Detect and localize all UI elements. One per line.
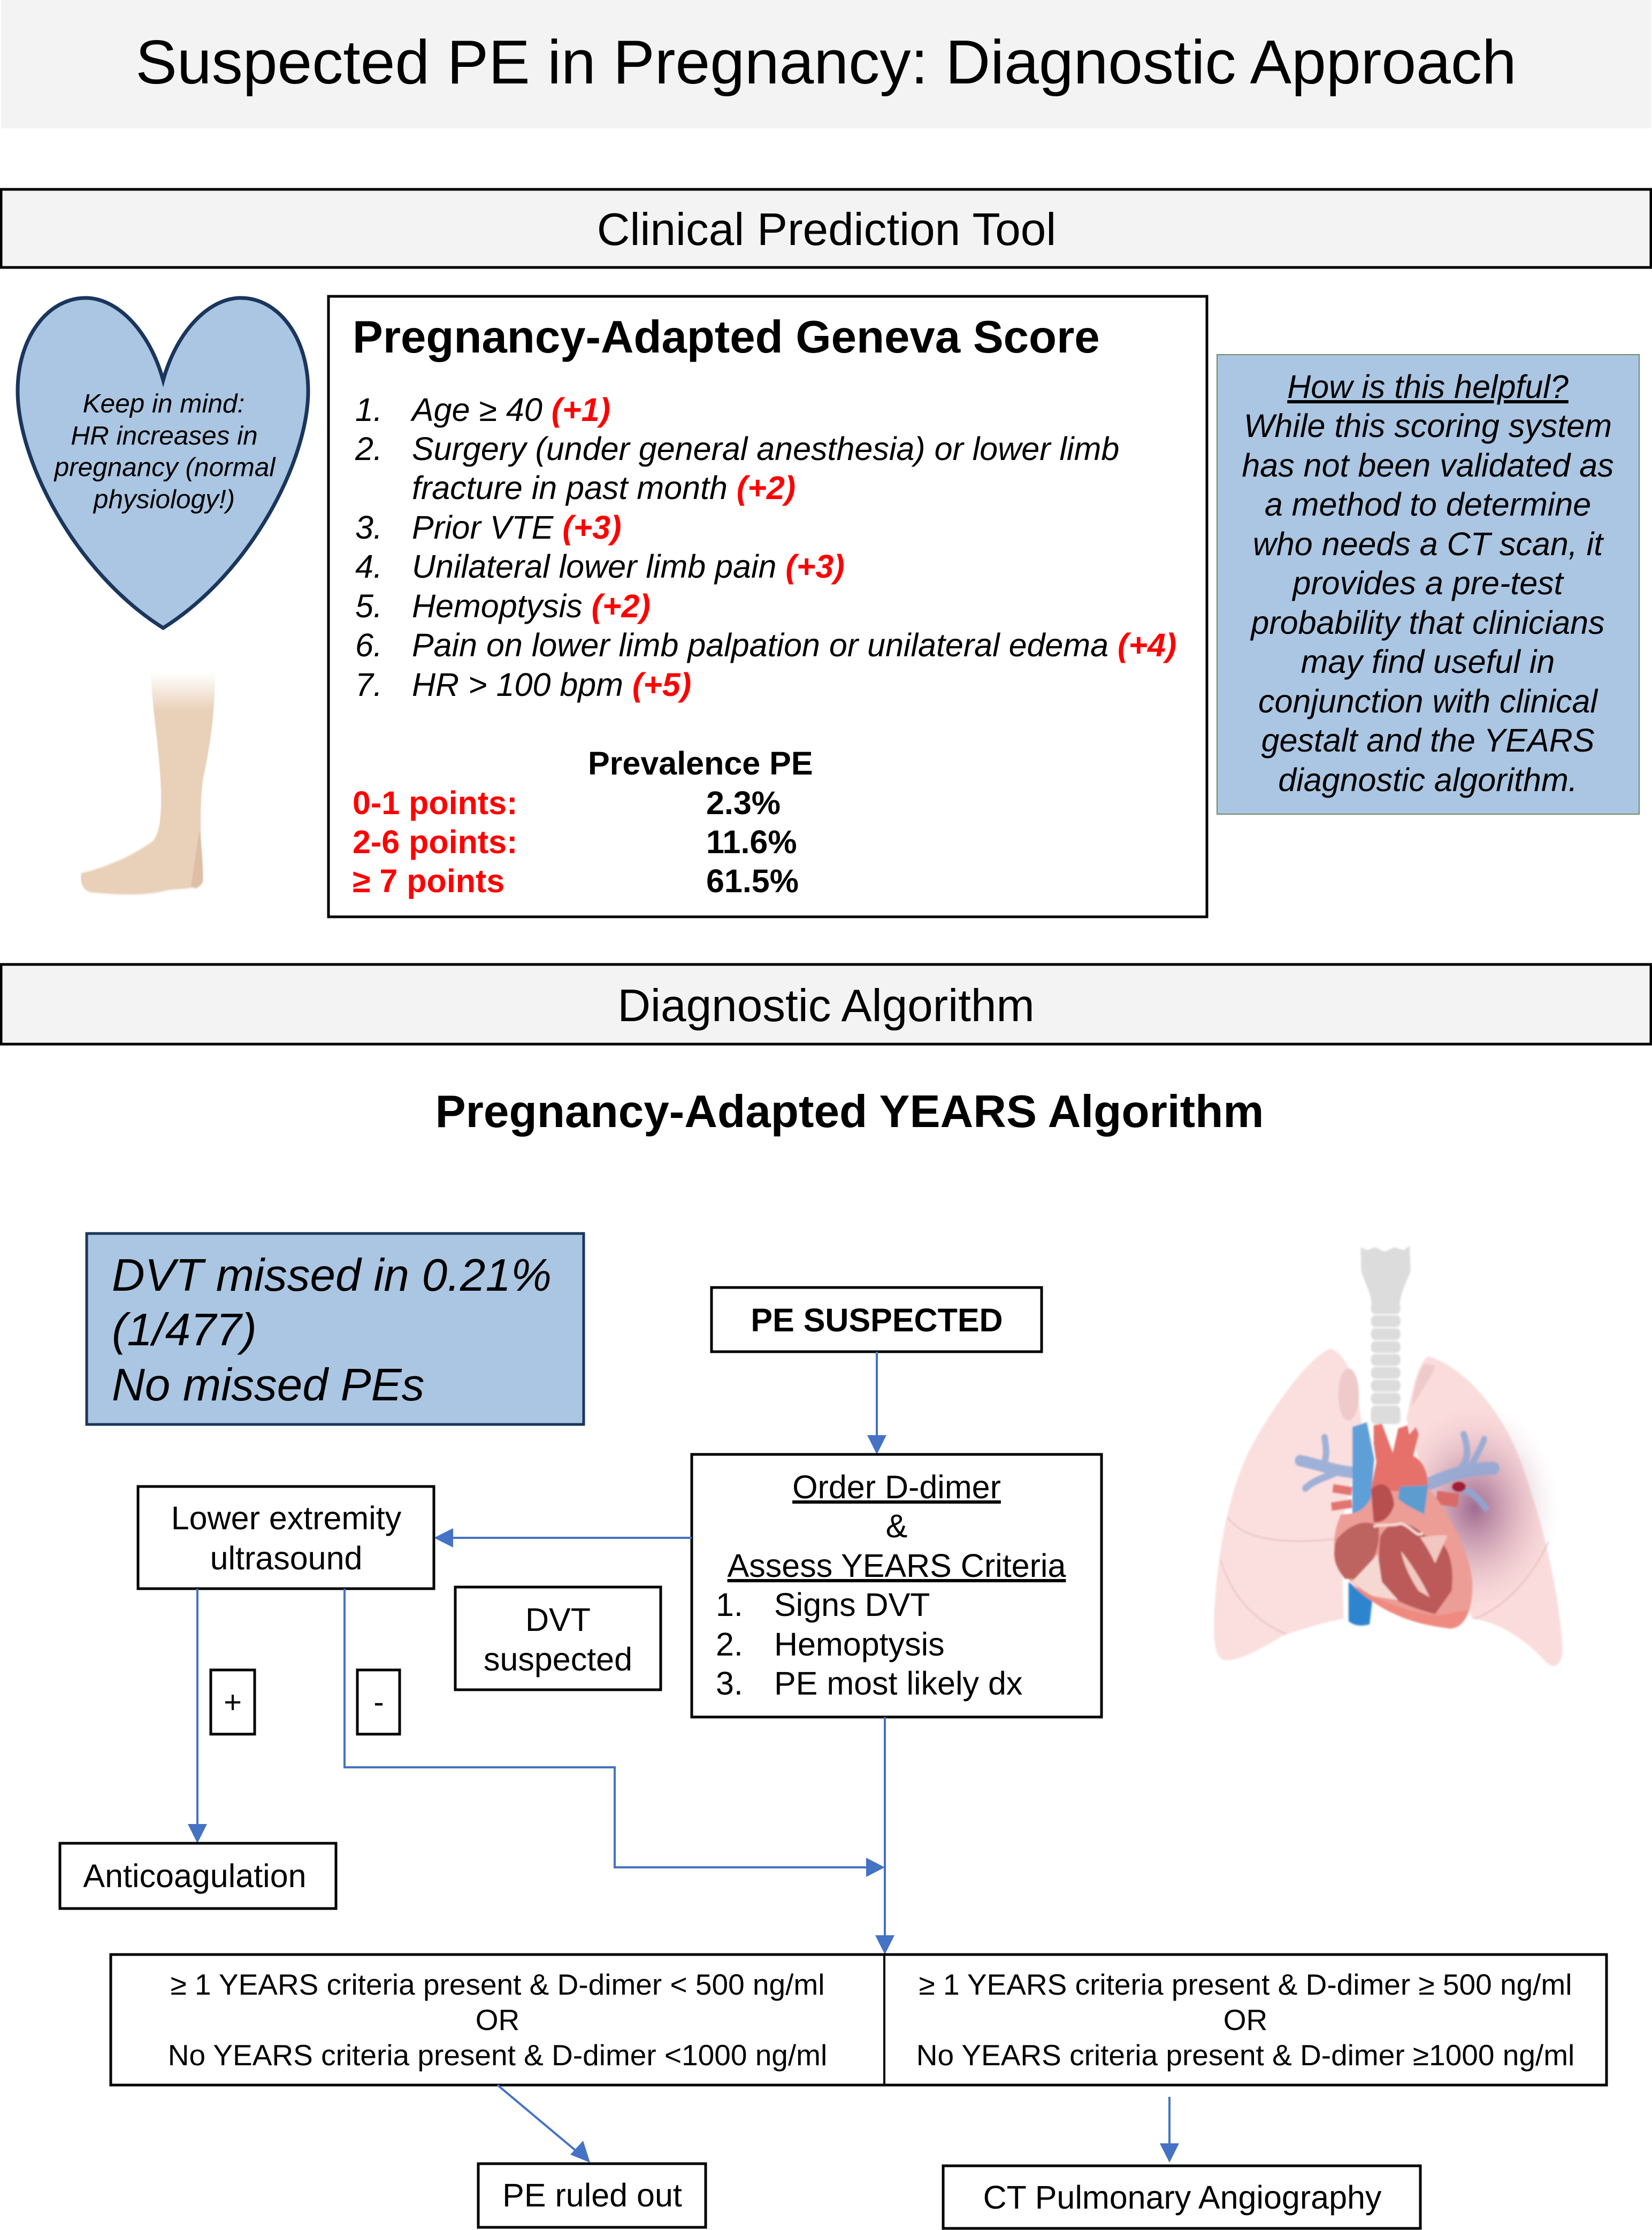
list: scoring criteria: 7. <box>355 666 383 703</box>
box: order D-dimer and assess YEARS criteria: Hemoptysis <box>774 1626 945 1662</box>
list: scoring criteria: 4. <box>355 548 383 585</box>
list: scoring criteria: 5. <box>355 588 383 624</box>
heading: diagnostic algorithm: Diagnostic Algorithm <box>617 980 1035 1031</box>
callout: DVT missed: No missed PEs <box>112 1360 424 1411</box>
box: lower extremity ultrasound <box>138 1486 434 1589</box>
aorta arch <box>1371 1424 1428 1493</box>
table: prevalence of PE by score: 11.6% <box>706 824 797 860</box>
box: PE suspected <box>712 1288 1042 1352</box>
callout: how is this helpful: a method to determine <box>1265 486 1591 523</box>
text: rule-out criteria: No YEARS criteria present & D-dimer <1000 ng/ml <box>168 2039 827 2072</box>
callout: how is this helpful: may find useful in <box>1301 643 1555 680</box>
arrow: to PE ruled out <box>498 2085 590 2163</box>
callout: how is this helpful: probability that clinicians <box>1250 604 1605 641</box>
list: scoring criteria: Unilateral lower limb pain (+3) <box>412 548 845 585</box>
callout: how is this helpful: who needs a CT scan, it <box>1253 526 1604 562</box>
box: order D-dimer and assess YEARS criteria <box>692 1454 1102 1717</box>
list: scoring criteria: fracture in past month (+2) <box>412 470 796 506</box>
arrow: positive to anticoagulation <box>188 1589 207 1843</box>
list: scoring criteria <box>355 392 1176 703</box>
box: DVT suspected: suspected <box>484 1641 632 1677</box>
heading: YEARS algorithm: Pregnancy-Adapted YEARS Algorithm <box>435 1086 1264 1137</box>
pulmonary artery trunk <box>1398 1485 1428 1514</box>
callout: how is this helpful: gestalt and the YEARS <box>1261 722 1595 758</box>
list: scoring criteria: HR > 100 bpm (+5) <box>412 666 691 703</box>
pulmonary vessels <box>1300 1435 1494 1508</box>
callout: DVT missed: (1/477) <box>112 1305 257 1355</box>
title <box>1 0 1651 128</box>
box: positive: + <box>224 1685 242 1720</box>
text: rule-out criteria: OR <box>476 2003 519 2036</box>
trachea <box>1360 1246 1411 1424</box>
table: prevalence of PE by score: 2-6 points: <box>353 824 517 860</box>
panel: heart callout: physiology!) <box>93 485 235 514</box>
arrow: D-dimer to ultrasound <box>434 1528 692 1547</box>
box: rule-out and CT criteria <box>111 1955 1607 2085</box>
box: DVT suspected <box>455 1587 661 1690</box>
list: scoring criteria: Prior VTE (+3) <box>412 509 622 546</box>
callout: how is this helpful: While this scoring system <box>1244 408 1612 444</box>
inferior vena cava <box>1349 1582 1372 1626</box>
box: order D-dimer and assess YEARS criteria: & <box>886 1508 907 1544</box>
box: negative: - <box>373 1685 384 1720</box>
text: rule-out criteria <box>168 1968 827 2072</box>
heart body <box>1334 1484 1473 1629</box>
list: scoring criteria: 2. <box>355 431 383 467</box>
callout: how is this helpful <box>1217 355 1639 814</box>
box: order D-dimer and assess YEARS criteria: 3. <box>716 1665 743 1702</box>
embolus shadow <box>1390 1404 1559 1613</box>
text: rule-out criteria: ≥ 1 YEARS criteria present & D-dimer < 500 ng/ml <box>171 1968 824 2001</box>
list: scoring criteria: Surgery (under general anesthesia) or lower limb <box>412 431 1119 467</box>
box: lower extremity ultrasound: Lower extremity <box>171 1500 402 1536</box>
text: CT criteria: OR <box>1223 2003 1267 2036</box>
list: scoring criteria: Pain on lower limb palpation or unilateral edema (+4) <box>412 627 1176 663</box>
box: lower extremity ultrasound: ultrasound <box>210 1540 362 1576</box>
box: DVT suspected: DVT <box>525 1601 591 1638</box>
box: positive <box>211 1670 255 1734</box>
callout: how is this helpful: conjunction with clinical <box>1258 683 1598 719</box>
table: prevalence of PE by score: 61.5% <box>706 863 799 899</box>
box: PE ruled out <box>478 2164 706 2227</box>
heading: Geneva score: Pregnancy-Adapted Geneva Score <box>353 312 1100 363</box>
arrow: suspected to D-dimer <box>867 1352 886 1454</box>
table: prevalence of PE by score: Prevalence PE <box>588 745 813 781</box>
text: CT criteria: ≥ 1 YEARS criteria present & D-dimer ≥ 500 ng/ml <box>919 1968 1572 2001</box>
callout: DVT missed <box>87 1233 584 1424</box>
box: anticoagulation: Anticoagulation <box>83 1858 307 1894</box>
table: prevalence of PE by score: 2.3% <box>706 785 781 821</box>
panel: pregnancy-adapted Geneva score <box>328 296 1207 917</box>
box: anticoagulation <box>60 1843 336 1909</box>
box: order D-dimer and assess YEARS criteria: 2. <box>716 1626 743 1662</box>
callout: how is this helpful: How is this helpful? <box>1287 369 1569 405</box>
table: prevalence of PE by score <box>353 745 813 899</box>
heading: diagnostic algorithm <box>1 964 1651 1044</box>
list: scoring criteria: Age ≥ 40 (+1) <box>410 392 610 428</box>
text: CT criteria <box>916 1968 1574 2072</box>
icon: lungs and heart <box>1214 1246 1563 1666</box>
callout: how is this helpful: has not been validated as <box>1242 447 1614 484</box>
list: scoring criteria: 3. <box>355 509 383 546</box>
box: CT pulmonary angiography <box>943 2166 1420 2228</box>
superior vena cava <box>1352 1422 1374 1514</box>
box: order D-dimer and assess YEARS criteria: Order D-dimer <box>792 1469 1001 1505</box>
table: prevalence of PE by score: ≥ 7 points <box>353 863 504 899</box>
arrow: negative to result <box>345 1589 885 1877</box>
list: scoring criteria: 1. <box>355 392 383 428</box>
title: Suspected PE in Pregnancy: Diagnostic Approach <box>135 27 1517 97</box>
callout: how is this helpful: provides a pre-test <box>1291 565 1565 601</box>
lung: right of patient <box>1214 1348 1363 1660</box>
panel: heart callout <box>18 298 308 628</box>
heading: clinical prediction tool: Clinical Prediction Tool <box>597 204 1056 255</box>
panel: heart callout: Keep in mind: <box>83 389 244 418</box>
callout: DVT missed: DVT missed in 0.21% <box>112 1250 552 1301</box>
heading: clinical prediction tool <box>1 189 1651 267</box>
box: CT pulmonary angiography: CT Pulmonary Angiography <box>983 2179 1382 2216</box>
arrow: to CT pulmonary angiography <box>1160 2097 1179 2163</box>
list: scoring criteria: 6. <box>355 627 383 663</box>
box: negative <box>357 1670 400 1734</box>
lung: left of patient <box>1406 1356 1563 1666</box>
box: PE ruled out: PE ruled out <box>502 2177 682 2213</box>
icon: lower leg and foot <box>81 673 215 894</box>
box: order D-dimer and assess YEARS criteria: Signs DVT <box>774 1587 930 1623</box>
box: order D-dimer and assess YEARS criteria: 1. <box>716 1587 743 1623</box>
list: scoring criteria: Hemoptysis (+2) <box>412 588 651 624</box>
box: order D-dimer and assess YEARS criteria: PE most likely dx <box>774 1665 1022 1702</box>
table: prevalence of PE by score: 0-1 points: <box>353 785 517 821</box>
arrow: D-dimer to result boxes <box>875 1717 894 1955</box>
box: order D-dimer and assess YEARS criteria: Assess YEARS Criteria <box>728 1547 1066 1584</box>
text: CT criteria: No YEARS criteria present & D-dimer ≥1000 ng/ml <box>916 2039 1574 2072</box>
panel: heart callout: pregnancy (normal <box>53 453 276 482</box>
box: PE suspected: PE SUSPECTED <box>751 1302 1003 1338</box>
callout: how is this helpful: diagnostic algorithm. <box>1278 762 1578 798</box>
panel: heart callout: HR increases in <box>71 421 258 450</box>
